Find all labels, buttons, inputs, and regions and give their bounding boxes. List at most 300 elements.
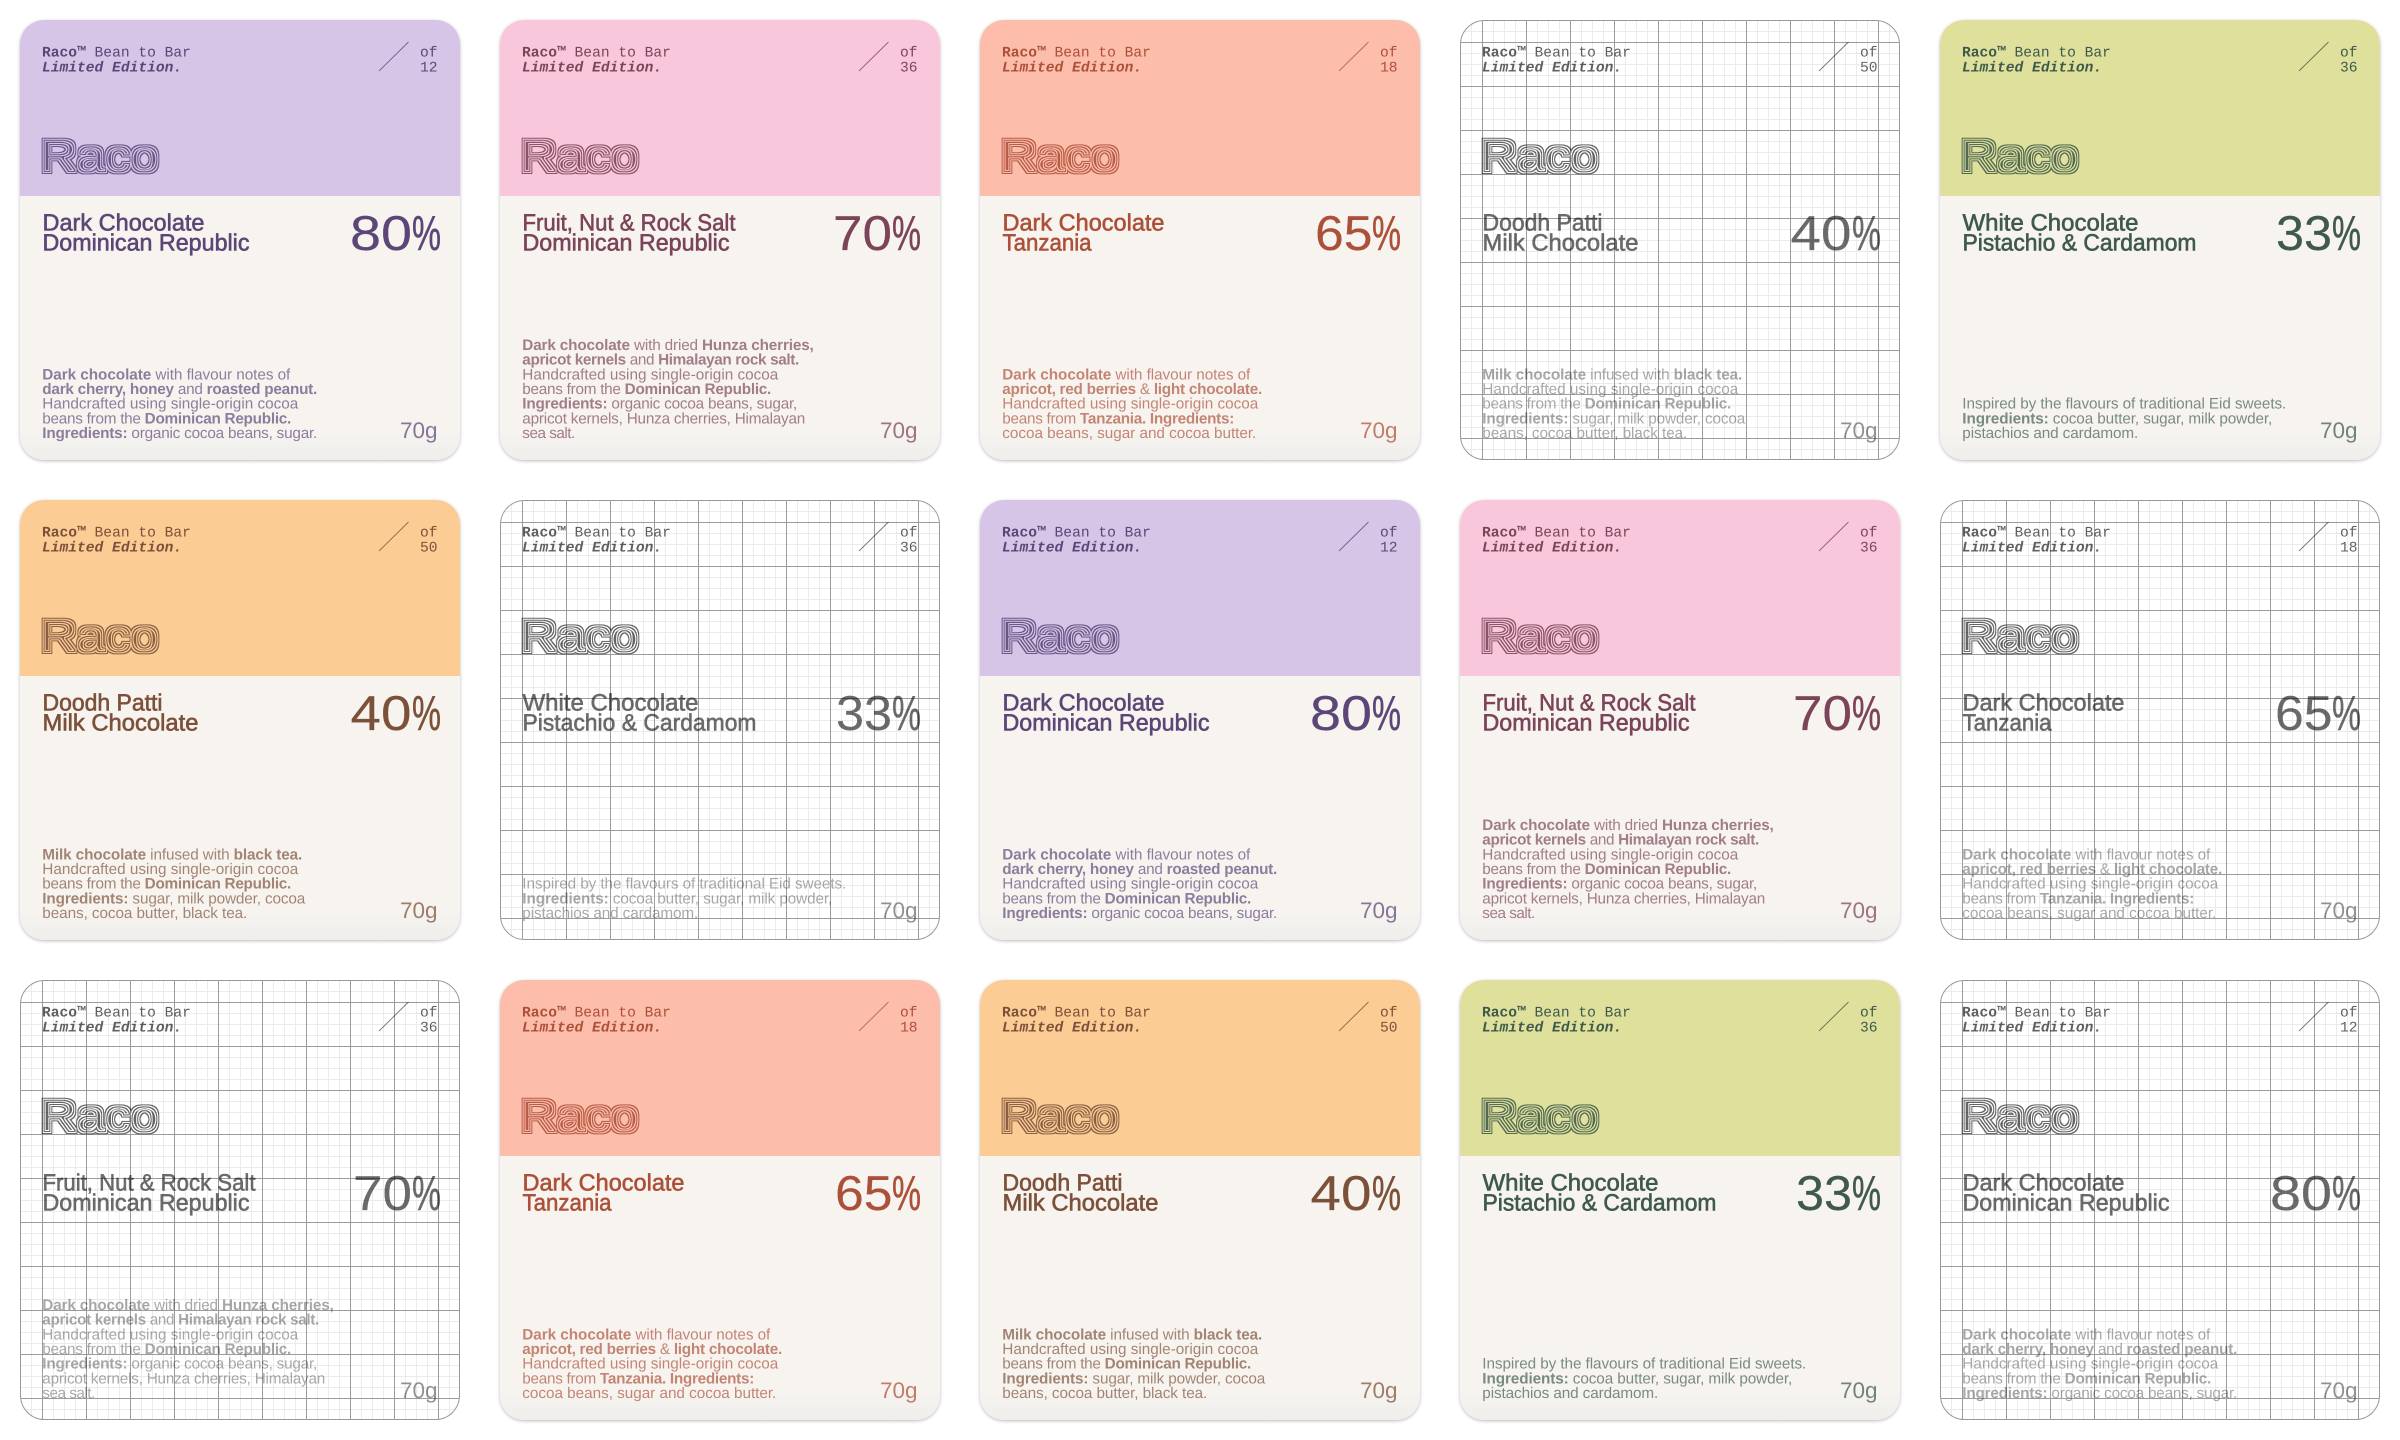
edition count: 18 — [900, 1020, 918, 1036]
card: White Chocolate Pistachio & Cardamom 33% green, second — [1460, 980, 1900, 1420]
edition count: 12 — [1380, 540, 1398, 556]
description: Handcrafted using single-origin cocoa — [1962, 1356, 2219, 1373]
edition text — [42, 1006, 191, 1036]
edition text: Raco™ Bean to Bar — [42, 526, 191, 542]
edition text — [522, 46, 671, 76]
product title: Fruit, Nut & Rock Salt — [42, 1170, 256, 1196]
product title: Dominican Republic — [1002, 709, 1210, 735]
cocoa percentage: % — [2332, 1167, 2361, 1221]
edition count — [2340, 526, 2358, 556]
edition text: Raco™ Bean to Bar — [522, 1006, 671, 1022]
edition count: of — [1860, 46, 1878, 62]
edition text: Raco™ Bean to Bar — [1002, 1006, 1151, 1022]
description: Handcrafted using single-origin cocoa — [1962, 876, 2219, 893]
description — [1482, 817, 1774, 922]
product title — [42, 690, 198, 735]
net weight: 70g — [1360, 418, 1398, 443]
description: beans from the Dominican Republic. — [1482, 396, 1731, 413]
cocoa percentage: % — [412, 1167, 441, 1221]
edition number slash — [379, 522, 408, 551]
product title: Tanzania — [522, 1189, 612, 1215]
description: Handcrafted using single-origin cocoa — [1482, 381, 1739, 398]
product title: Tanzania — [1962, 709, 2052, 735]
description: Handcrafted using single-origin cocoa — [1002, 1341, 1259, 1358]
edition text: Raco™ Bean to Bar — [1962, 526, 2111, 542]
logo: Raco — [1480, 612, 1598, 661]
description: beans from the Dominican Republic. — [42, 410, 291, 427]
cocoa percentage — [2270, 1167, 2361, 1221]
edition count — [1860, 526, 1878, 556]
edition count: of — [420, 46, 438, 62]
product title — [522, 210, 736, 255]
edition text: Limited Edition. — [42, 1020, 182, 1036]
edition count — [420, 46, 438, 76]
edition count: of — [900, 46, 918, 62]
edition text: Raco™ Bean to Bar — [1002, 526, 1151, 542]
header band — [1460, 500, 1900, 676]
edition text — [1002, 1006, 1151, 1036]
logo: Raco — [1480, 1092, 1598, 1141]
description: dark cherry, honey and roasted peanut. — [1962, 1341, 2237, 1358]
cocoa percentage: 33 — [1796, 1167, 1852, 1221]
edition count: 36 — [2340, 60, 2358, 76]
description: apricot kernels and Himalayan rock salt. — [42, 1312, 319, 1329]
edition count: of — [420, 1006, 438, 1022]
edition count — [900, 1006, 918, 1036]
card base — [1940, 20, 2380, 460]
product title — [1962, 1170, 2170, 1215]
product title — [1482, 690, 1696, 735]
product title: Pistachio & Cardamom — [1482, 1189, 1716, 1215]
cocoa percentage: % — [1852, 687, 1881, 741]
product title: Pistachio & Cardamom — [522, 709, 756, 735]
logo: Raco — [40, 612, 158, 661]
edition text: Limited Edition. — [1482, 1020, 1622, 1036]
product title: Fruit, Nut & Rock Salt — [522, 210, 736, 236]
cocoa percentage — [1790, 207, 1881, 261]
description — [522, 876, 846, 922]
description: Milk chocolate infused with black tea. — [42, 846, 302, 863]
edition number slash — [379, 1002, 408, 1031]
edition count: of — [2340, 46, 2358, 62]
description: apricot kernels and Himalayan rock salt. — [522, 352, 799, 369]
construction grid base — [1460, 20, 1900, 460]
edition count: 50 — [420, 540, 438, 556]
cocoa percentage: 33 — [2276, 207, 2332, 261]
card base — [20, 20, 460, 460]
edition text: Raco™ Bean to Bar — [1482, 46, 1631, 62]
cocoa percentage — [2276, 207, 2361, 261]
logo: Raco — [40, 1092, 158, 1141]
net weight: 70g — [880, 898, 918, 923]
product title — [42, 1170, 256, 1215]
description — [42, 1297, 334, 1402]
card: Dark Chocolate Tanzania 65% salmon — [980, 20, 1420, 460]
description: cocoa beans, sugar and cocoa butter. — [1002, 425, 1256, 442]
card base — [500, 980, 940, 1420]
description: Handcrafted using single-origin cocoa — [42, 396, 299, 413]
product title — [1962, 210, 2196, 255]
product title: Dark Chocolate — [1002, 210, 1164, 236]
net weight: 70g — [2320, 1378, 2358, 1403]
construction grid base — [1940, 980, 2380, 1420]
logo: Raco — [1960, 132, 2078, 181]
description: Ingredients: sugar, milk powder, cocoa — [42, 890, 306, 907]
cocoa percentage: 40 — [350, 687, 412, 741]
card: Dark Chocolate Dominican Republic 80% purple, second — [980, 500, 1420, 940]
edition count: of — [1380, 46, 1398, 62]
cocoa percentage — [833, 207, 921, 261]
card base — [1460, 500, 1900, 940]
cocoa percentage — [353, 1167, 441, 1221]
description: pistachios and cardamom. — [1482, 1385, 1658, 1402]
edition count: of — [900, 1006, 918, 1022]
edition text: Raco™ Bean to Bar — [42, 46, 191, 62]
product title: Doodh Patti — [1482, 210, 1602, 236]
edition number slash — [379, 42, 408, 71]
cocoa percentage — [1793, 687, 1881, 741]
edition count: of — [900, 526, 918, 542]
description: Ingredients: organic cocoa beans, sugar. — [1962, 1385, 2237, 1402]
description — [1962, 1326, 2237, 1402]
description: Handcrafted using single-origin cocoa — [522, 366, 779, 383]
card base — [500, 20, 940, 460]
card: Doodh Patti Milk Chocolate 40% grid — [1460, 20, 1900, 460]
logo: Raco — [40, 132, 158, 181]
product title: Pistachio & Cardamom — [1962, 229, 2196, 255]
description: sea salt. — [1482, 905, 1535, 922]
edition number slash — [1819, 42, 1848, 71]
cocoa percentage — [350, 687, 441, 741]
description — [1002, 846, 1277, 922]
description: beans from the Dominican Republic. — [1002, 1356, 1251, 1373]
edition text: Limited Edition. — [1962, 540, 2102, 556]
cocoa percentage: 65 — [835, 1167, 892, 1221]
header band — [500, 20, 940, 196]
description: Dark chocolate with flavour notes of — [1002, 846, 1251, 863]
description: beans from the Dominican Republic. — [42, 1341, 291, 1358]
card: Doodh Patti Milk Chocolate 40% orange, second — [980, 980, 1420, 1420]
cocoa percentage: 80 — [2270, 1167, 2332, 1221]
card: Fruit, Nut & Rock Salt 70% pink — [500, 20, 940, 460]
edition count — [2340, 46, 2358, 76]
edition text — [1002, 46, 1151, 76]
edition number slash — [859, 42, 888, 71]
construction grid base — [20, 980, 460, 1420]
edition text: Limited Edition. — [1002, 60, 1142, 76]
header band — [1460, 980, 1900, 1156]
net weight: 70g — [400, 1378, 438, 1403]
net weight: 70g — [1840, 1378, 1878, 1403]
description: apricot kernels, Hunza cherries, Himalayan — [42, 1370, 325, 1387]
edition count: 36 — [1860, 1020, 1878, 1036]
edition text: Limited Edition. — [1002, 540, 1142, 556]
description: Inspired by the flavours of traditional Eid sweets. — [522, 876, 846, 893]
description: beans from Tanzania. Ingredients: — [1962, 890, 2194, 907]
edition number slash — [1339, 1002, 1368, 1031]
edition count: of — [420, 526, 438, 542]
cocoa percentage: 65 — [1315, 207, 1372, 261]
cocoa percentage: % — [412, 207, 441, 261]
description: Ingredients: organic cocoa beans, sugar, — [1482, 876, 1757, 893]
product title — [1002, 210, 1164, 255]
description: beans from the Dominican Republic. — [42, 876, 291, 893]
logo: Raco — [1480, 132, 1598, 181]
edition text: Limited Edition. — [1482, 60, 1622, 76]
cocoa percentage: 33 — [836, 687, 892, 741]
edition text: Limited Edition. — [1962, 1020, 2102, 1036]
product title: Dominican Republic — [522, 229, 730, 255]
cocoa percentage — [1310, 1167, 1401, 1221]
cocoa percentage: % — [2332, 207, 2361, 261]
description: beans, cocoa butter, black tea. — [1002, 1385, 1207, 1402]
card: Fruit, Nut & Rock Salt 70% pink, second — [1460, 500, 1900, 940]
description: cocoa beans, sugar and cocoa butter. — [522, 1385, 776, 1402]
description: Ingredients: cocoa butter, sugar, milk powder, — [1962, 410, 2272, 427]
description: dark cherry, honey and roasted peanut. — [42, 381, 317, 398]
cocoa percentage: % — [892, 1167, 921, 1221]
description: Handcrafted using single-origin cocoa — [522, 1356, 779, 1373]
edition text: Raco™ Bean to Bar — [42, 1006, 191, 1022]
card: Dark Chocolate Tanzania 65% grid — [1940, 500, 2380, 940]
product title — [1002, 1170, 1158, 1215]
edition count: 18 — [2340, 540, 2358, 556]
cocoa percentage: % — [1372, 1167, 1401, 1221]
edition number slash — [859, 522, 888, 551]
description: beans from the Dominican Republic. — [1482, 861, 1731, 878]
edition text — [42, 46, 191, 76]
cocoa percentage: % — [2332, 687, 2361, 741]
card: White Chocolate Pistachio & Cardamom 33% green — [1940, 20, 2380, 460]
description: apricot, red berries & light chocolate. — [1962, 861, 2222, 878]
edition number slash — [1819, 522, 1848, 551]
card: Dark Chocolate Dominican Republic 80% grid — [1940, 980, 2380, 1420]
description — [1962, 396, 2286, 442]
product title: Dominican Republic — [42, 229, 250, 255]
cocoa percentage: 70 — [833, 207, 892, 261]
description: Ingredients: sugar, milk powder, cocoa — [1002, 1370, 1266, 1387]
product title: Dark Chocolate — [1962, 1170, 2124, 1196]
edition count: 36 — [1860, 540, 1878, 556]
edition count — [420, 1006, 438, 1036]
edition count: of — [1380, 526, 1398, 542]
cocoa percentage: 65 — [2275, 687, 2332, 741]
header band — [20, 500, 460, 676]
description: beans from Tanzania. Ingredients: — [1002, 410, 1234, 427]
product title: Dark Chocolate — [522, 1170, 684, 1196]
edition count: 36 — [420, 1020, 438, 1036]
description: Inspired by the flavours of traditional Eid sweets. — [1482, 1356, 1806, 1373]
description: apricot kernels and Himalayan rock salt. — [1482, 832, 1759, 849]
net weight: 70g — [2320, 418, 2358, 443]
description: Ingredients: organic cocoa beans, sugar, — [522, 396, 797, 413]
description: apricot, red berries & light chocolate. — [522, 1341, 782, 1358]
card base — [980, 20, 1420, 460]
description — [1482, 1356, 1806, 1402]
description: dark cherry, honey and roasted peanut. — [1002, 861, 1277, 878]
edition text: Raco™ Bean to Bar — [1482, 1006, 1631, 1022]
product title: Dominican Republic — [1962, 1189, 2170, 1215]
edition count — [1380, 526, 1398, 556]
cocoa percentage — [1310, 687, 1401, 741]
description — [42, 846, 306, 922]
description: beans, cocoa butter, black tea. — [1482, 425, 1687, 442]
cocoa percentage: 40 — [1310, 1167, 1372, 1221]
edition text — [1962, 1006, 2111, 1036]
description: pistachios and cardamom. — [1962, 425, 2138, 442]
edition count: 36 — [900, 60, 918, 76]
net weight: 70g — [1360, 1378, 1398, 1403]
edition text: Limited Edition. — [1482, 540, 1622, 556]
edition text — [1482, 46, 1631, 76]
net weight: 70g — [400, 418, 438, 443]
edition text: Raco™ Bean to Bar — [1482, 526, 1631, 542]
edition number slash — [2299, 42, 2328, 71]
description: beans from the Dominican Republic. — [522, 381, 771, 398]
cocoa percentage — [350, 207, 441, 261]
product title — [1962, 690, 2124, 735]
edition text: Raco™ Bean to Bar — [1962, 46, 2111, 62]
cocoa percentage: % — [412, 687, 441, 741]
cocoa percentage — [2275, 687, 2361, 741]
description: apricot kernels, Hunza cherries, Himalayan — [1482, 890, 1765, 907]
net weight: 70g — [1840, 418, 1878, 443]
header band — [20, 20, 460, 196]
description — [1962, 846, 2222, 922]
product title — [522, 1170, 684, 1215]
description: Ingredients: cocoa butter, sugar, milk powder, — [522, 890, 832, 907]
edition text — [522, 526, 671, 556]
card: Doodh Patti Milk Chocolate 40% orange — [20, 500, 460, 940]
product title — [1482, 1170, 1716, 1215]
logo: Raco — [520, 132, 638, 181]
cocoa percentage: % — [892, 207, 921, 261]
description: cocoa beans, sugar and cocoa butter. — [1962, 905, 2216, 922]
net weight: 70g — [880, 418, 918, 443]
edition text: Limited Edition. — [42, 540, 182, 556]
edition text: Limited Edition. — [522, 540, 662, 556]
description: pistachios and cardamom. — [522, 905, 698, 922]
description — [1002, 1326, 1266, 1402]
description: Dark chocolate with dried Hunza cherries, — [1482, 817, 1774, 834]
description: Dark chocolate with dried Hunza cherries, — [42, 1297, 334, 1314]
logo: Raco — [1000, 612, 1118, 661]
card: Dark Chocolate Dominican Republic 80% purple — [20, 20, 460, 460]
description: Dark chocolate with flavour notes of — [522, 1326, 771, 1343]
edition count — [900, 526, 918, 556]
edition number slash — [2299, 522, 2328, 551]
header band — [980, 980, 1420, 1156]
edition count: 50 — [1860, 60, 1878, 76]
description — [1482, 366, 1746, 442]
cocoa percentage — [1796, 1167, 1881, 1221]
description: Milk chocolate infused with black tea. — [1482, 366, 1742, 383]
cocoa percentage: % — [1372, 207, 1401, 261]
edition text: Limited Edition. — [522, 1020, 662, 1036]
description: apricot kernels, Hunza cherries, Himalayan — [522, 410, 805, 427]
product title: Dark Chocolate — [1962, 690, 2124, 716]
header band — [500, 980, 940, 1156]
logo: Raco — [1960, 612, 2078, 661]
product title — [522, 690, 756, 735]
description: Handcrafted using single-origin cocoa — [42, 1326, 299, 1343]
product title: Dark Chocolate — [42, 210, 204, 236]
edition count: 12 — [420, 60, 438, 76]
cocoa percentage: % — [1372, 687, 1401, 741]
edition text — [1002, 526, 1151, 556]
edition text: Raco™ Bean to Bar — [522, 46, 671, 62]
edition number slash — [859, 1002, 888, 1031]
description: Dark chocolate with flavour notes of — [1962, 846, 2211, 863]
net weight: 70g — [2320, 898, 2358, 923]
card base — [1460, 980, 1900, 1420]
description: Dark chocolate with flavour notes of — [42, 366, 291, 383]
description: Handcrafted using single-origin cocoa — [1002, 876, 1259, 893]
product title: Fruit, Nut & Rock Salt — [1482, 690, 1696, 716]
description: Ingredients: cocoa butter, sugar, milk powder, — [1482, 1370, 1792, 1387]
edition text: Limited Edition. — [522, 60, 662, 76]
card: White Chocolate Pistachio & Cardamom 33% grid — [500, 500, 940, 940]
description: Ingredients: organic cocoa beans, sugar. — [42, 425, 317, 442]
product title: Milk Chocolate — [1482, 229, 1638, 255]
edition text: Raco™ Bean to Bar — [1962, 1006, 2111, 1022]
cocoa percentage: 40 — [1790, 207, 1852, 261]
card: Fruit, Nut & Rock Salt 70% grid — [20, 980, 460, 1420]
cocoa percentage: 80 — [1310, 687, 1372, 741]
cocoa percentage: 70 — [353, 1167, 412, 1221]
net weight: 70g — [400, 898, 438, 923]
edition count — [1860, 46, 1878, 76]
product title — [1482, 210, 1638, 255]
edition text — [42, 526, 191, 556]
logo: Raco — [520, 1092, 638, 1141]
edition count: 18 — [1380, 60, 1398, 76]
cocoa percentage: % — [1852, 1167, 1881, 1221]
edition count: 36 — [900, 540, 918, 556]
edition text: Limited Edition. — [1962, 60, 2102, 76]
product title: White Chocolate — [1482, 1170, 1658, 1196]
logo: Raco — [520, 612, 638, 661]
description: Handcrafted using single-origin cocoa — [1002, 396, 1259, 413]
edition text — [1482, 526, 1631, 556]
edition text — [1482, 1006, 1631, 1036]
description: Handcrafted using single-origin cocoa — [1482, 846, 1739, 863]
construction grid base — [1940, 500, 2380, 940]
product title: Milk Chocolate — [42, 709, 198, 735]
edition count — [900, 46, 918, 76]
edition number slash — [1819, 1002, 1848, 1031]
product title: Milk Chocolate — [1002, 1189, 1158, 1215]
edition text — [522, 1006, 671, 1036]
edition count: of — [2340, 526, 2358, 542]
edition text: Raco™ Bean to Bar — [522, 526, 671, 542]
product title: White Chocolate — [1962, 210, 2138, 236]
logo: Raco — [1000, 1092, 1118, 1141]
product title: Dominican Republic — [42, 1189, 250, 1215]
logo: Raco — [1960, 1092, 2078, 1141]
description: sea salt. — [522, 425, 575, 442]
edition count: of — [1860, 526, 1878, 542]
card base — [980, 980, 1420, 1420]
description — [522, 1326, 782, 1402]
description: Ingredients: organic cocoa beans, sugar, — [42, 1356, 317, 1373]
description — [522, 337, 814, 442]
edition text — [1962, 46, 2111, 76]
edition count — [1860, 1006, 1878, 1036]
edition count: of — [1380, 1006, 1398, 1022]
product title: Dark Chocolate — [1002, 690, 1164, 716]
edition number slash — [2299, 1002, 2328, 1031]
